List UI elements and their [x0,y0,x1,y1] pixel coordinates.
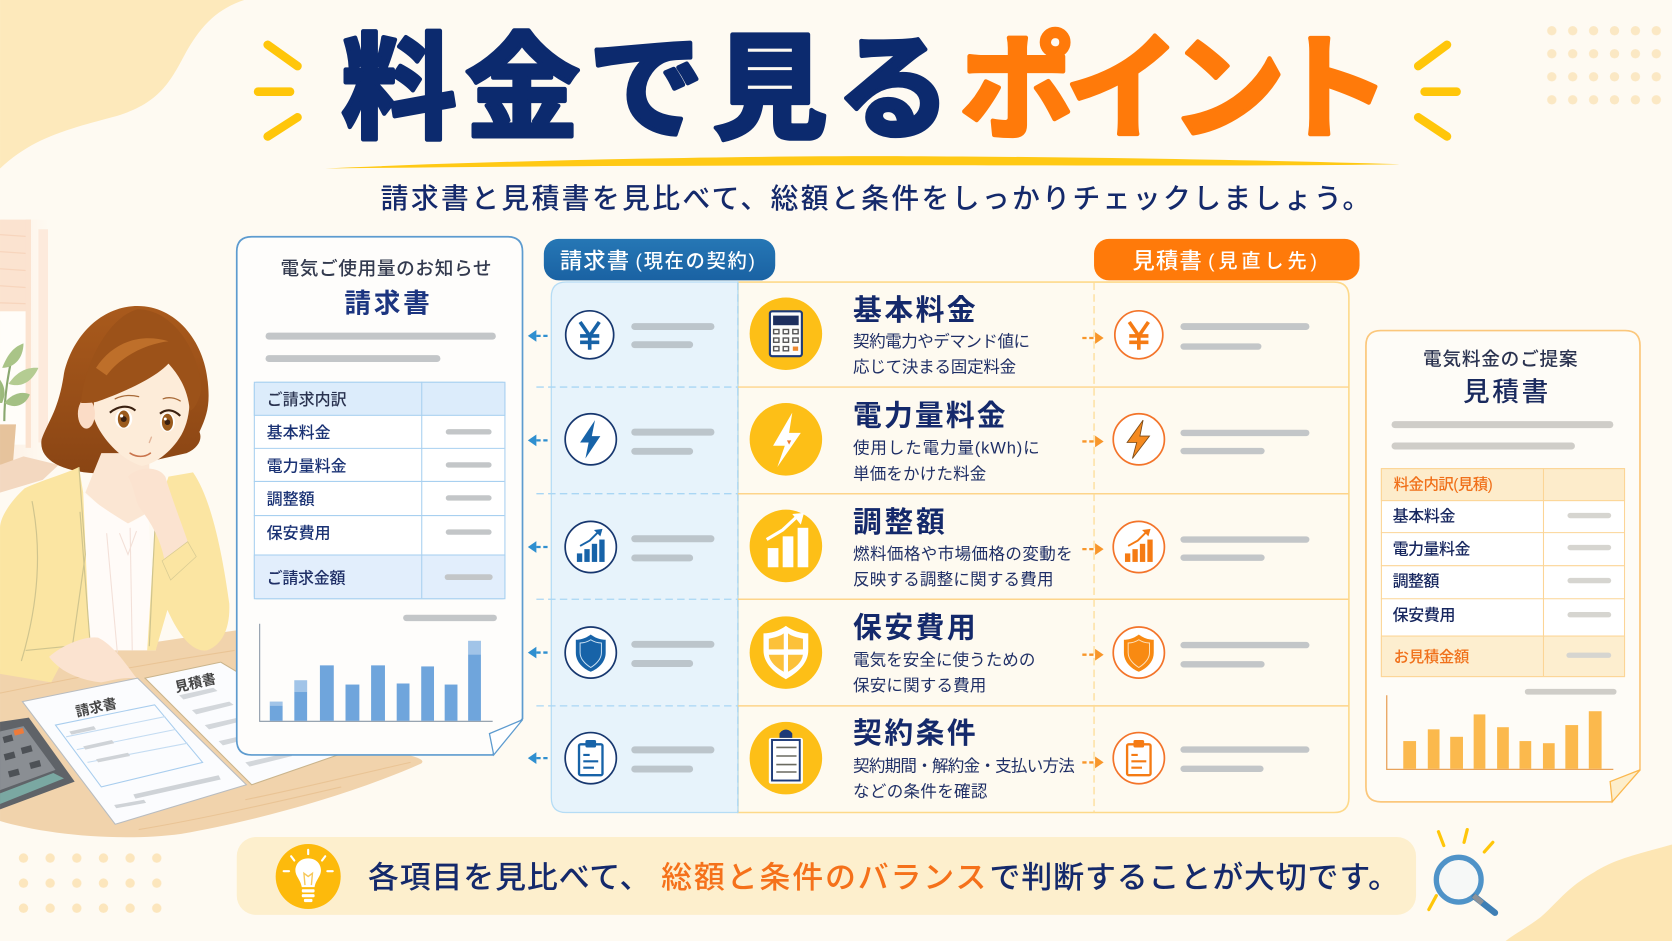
arrow to estimate [1082,543,1104,555]
cardigan cuff [162,542,196,580]
column header: estimate (new contract): (見直し先) [1208,251,1317,273]
arrow to bill [528,752,549,764]
description [853,439,1040,483]
description: 保安に関する費用 [853,676,986,695]
heading: 保安費用 [853,613,976,645]
bill table [254,382,505,599]
arrow to bill [528,647,549,658]
estimate placeholder lines [1180,746,1309,772]
description: 単価をかけた料金 [853,464,986,483]
description: 契約期間・解約金・支払い方法 [853,756,1075,775]
title underline brush stroke [325,156,1399,168]
decorative dots: top right [1541,19,1667,111]
decorative dots: bottom left [10,846,170,920]
arrow to bill [528,435,549,446]
description: 電気を安全に使うための [853,650,1035,669]
icon: lightning bolt [750,403,822,476]
arrow to estimate [1082,649,1104,661]
bill table: 電力量料金 [267,457,347,475]
paper: bill: 請求書 [74,695,118,720]
icon: clipboard [750,722,822,794]
arrow to estimate [1082,757,1104,768]
icon: shield [750,616,822,689]
bill placeholder lines [266,333,496,362]
title: 料金で見る [341,26,951,154]
hand on paper [49,637,137,682]
icon: light bulb [276,844,341,909]
cardigan left side [0,467,90,682]
hair highlight [96,338,169,375]
arrow to estimate [1082,332,1104,344]
description [853,650,1035,695]
hair back [41,306,209,473]
heading: 調整額 [853,507,945,539]
estimate table: 電力量料金 [1393,540,1470,558]
description [853,544,1073,589]
shelf [0,456,59,493]
row 4: safety cost [528,613,1309,695]
eyes [110,407,180,432]
arrow to estimate [1082,436,1104,447]
column header: bill (current contract): (現在の契約) [636,251,755,273]
bill heading: 請求書 [344,288,430,318]
estimate bolt icon [1113,414,1164,465]
bill placeholder lines [631,429,714,455]
icon: magnifying glass [1429,830,1495,913]
bill chart icon [565,521,616,573]
description: 契約電力やデマンド値に [853,331,1030,351]
document: estimate (right) [1366,331,1640,802]
estimate bar chart [1387,689,1617,769]
description [853,331,1030,377]
heading: 電力量料金 [853,400,1006,432]
page curl [489,720,523,755]
estimate shield icon [1113,627,1164,678]
face [94,358,190,466]
bill subtitle: 電気ご使用量のお知らせ [280,258,492,279]
description [853,756,1075,801]
comparison table panel [536,282,1349,813]
illustration: woman reviewing documents at a table [0,220,422,837]
icon: rising chart [750,510,822,582]
cardigan right side [147,472,229,651]
description: 応じて決まる固定料金 [853,358,1016,377]
hand at chin [128,469,188,559]
bill placeholder lines [631,535,714,561]
title [341,26,1390,154]
description: などの条件を確認 [853,782,988,801]
table [0,618,422,837]
estimate placeholder lines [1180,430,1309,454]
title rays: left [258,45,298,136]
bottom message text: で判断することが大切です。 [990,860,1399,895]
bottom message text: 総額と条件のバランス [661,860,986,895]
bill bar chart [260,615,497,721]
arrow to bill [528,541,549,553]
paper: bill [22,678,246,824]
description: 反映する調整に関する費用 [853,570,1054,589]
description: 使用した電力量(kWh)に [853,439,1040,458]
row 5: contract terms [528,718,1309,801]
cardigan seams [21,467,156,661]
bill table: 保安費用 [267,524,331,542]
estimate table: 基本料金 [1393,507,1456,525]
bangs [81,309,202,411]
estimate heading: 見積書 [1463,377,1548,407]
row 1: basic charge [528,295,1309,377]
eyebrows and mouth [115,396,180,456]
paper: estimate: 見積書 [173,670,217,695]
estimate table [1381,468,1625,677]
neck [85,453,149,524]
column header: estimate (new contract): 見積書 [1132,249,1202,274]
estimate subtitle: 電気料金のご提案 [1423,349,1578,370]
bottom message text [368,860,1399,895]
potted plant [0,343,38,465]
bill shield icon [565,627,616,678]
estimate table: 調整額 [1393,572,1440,590]
title: ポイント [960,26,1390,154]
estimate yen icon [1115,311,1163,359]
estimate table: お見積金額 [1394,648,1470,666]
estimate table: 料金内訳(見積) [1394,475,1493,493]
row 2: energy charge [528,400,1309,483]
column header: bill (current contract): 請求書 [560,249,629,274]
bill placeholder lines [631,746,714,773]
estimate chart icon [1113,521,1164,573]
bill table: ご請求内訳 [267,391,347,409]
decorative blob: bottom right [1506,845,1672,941]
estimate table: 保安費用 [1393,607,1456,625]
estimate clipboard icon [1113,733,1164,784]
decorative blob: top left [0,0,244,168]
estimate placeholder lines [1392,421,1613,449]
description: 燃料価格や市場価格の変動を [853,544,1073,563]
ear [78,399,95,429]
subtitle: 請求書と見積書を見比べて、総額と条件をしっかりチェックしましょう。 [381,183,1370,214]
bill placeholder lines [631,323,714,348]
heading: 基本料金 [853,295,976,327]
icon: calculator [750,297,822,370]
arrow to bill [528,330,549,342]
bill table: ご請求金額 [267,569,346,587]
column header: bill (current contract) [544,239,775,280]
title rays: right [1418,45,1457,136]
row 3: adjustment [528,507,1309,589]
bill bolt icon [565,414,616,465]
bill placeholder lines [631,641,714,667]
estimate placeholder lines [1180,642,1309,667]
column header: estimate (new contract) [1094,239,1360,280]
paper: estimate [145,662,363,785]
bill clipboard icon [565,733,616,784]
bill yen icon [566,311,614,359]
bill table: 基本料金 [267,424,331,442]
estimate placeholder lines [1180,536,1309,561]
bill table: 調整額 [267,490,315,508]
bottom message text: 各項目を見比べて、 [368,860,650,895]
page curl [1610,770,1640,802]
calculator [0,718,75,809]
estimate placeholder lines [1180,323,1309,350]
heading: 契約条件 [853,718,976,750]
blouse [83,493,156,650]
window blinds [0,220,49,465]
document: bill (left) [237,237,523,755]
bottom message bar [237,837,1416,915]
